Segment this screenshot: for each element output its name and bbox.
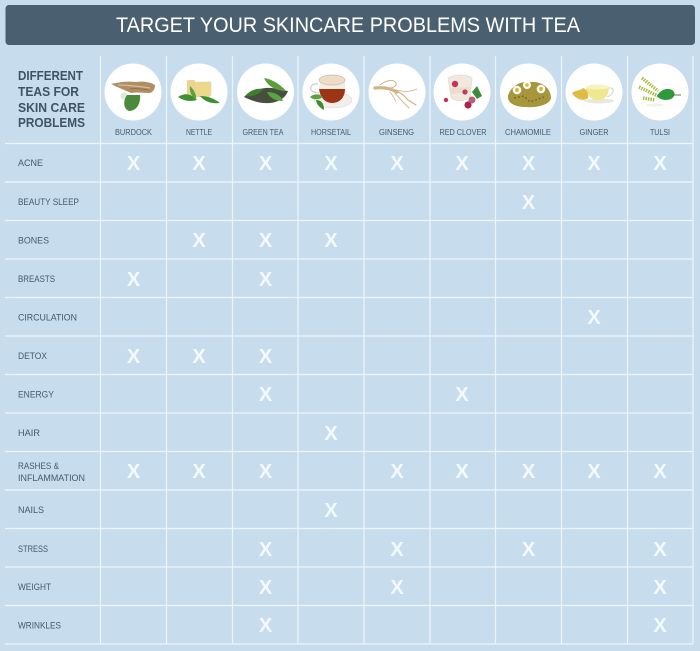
tea names <box>115 128 670 137</box>
row labels <box>18 158 85 630</box>
marks: breasts <box>127 269 273 291</box>
table heading: DIFFERENT <box>18 69 83 83</box>
marks: acne <box>127 153 667 175</box>
icon: tulsi <box>632 64 688 120</box>
marks: acne: X <box>455 153 469 175</box>
row labels: NAILS <box>18 505 44 515</box>
table heading: TEAS FOR <box>18 85 79 99</box>
marks: circulation: X <box>587 307 601 329</box>
table heading: PROBLEMS <box>18 116 85 130</box>
marks: stress: X <box>390 539 404 561</box>
marks: acne: X <box>324 153 338 175</box>
icon: green tea <box>237 64 294 120</box>
marks: beauty sleep: X <box>522 192 536 214</box>
tea names: TULSI <box>650 128 670 137</box>
marks: rashes and inflammation: X <box>192 461 206 483</box>
icon: chamomile <box>500 64 557 120</box>
marks: bones: X <box>324 230 338 252</box>
marks: rashes and inflammation: X <box>522 461 536 483</box>
row labels: ENERGY <box>18 390 54 400</box>
marks: nails: X <box>324 500 338 522</box>
marks: hair: X <box>324 423 338 445</box>
row labels: INFLAMMATION <box>18 473 85 483</box>
marks: detox <box>127 346 273 368</box>
marks: rashes and inflammation: X <box>455 461 469 483</box>
marks: rashes and inflammation: X <box>653 461 667 483</box>
marks: breasts: X <box>127 269 141 291</box>
title banner <box>6 5 695 45</box>
tea names: RED CLOVER <box>440 128 487 137</box>
icon: ginseng <box>368 64 426 120</box>
marks: acne: X <box>653 153 667 175</box>
marks: bones: X <box>259 230 273 252</box>
marks: acne: X <box>522 153 536 175</box>
tea names: CHAMOMILE <box>505 128 551 137</box>
marks: rashes and inflammation: X <box>259 461 273 483</box>
row labels: BEAUTY SLEEP <box>18 197 79 207</box>
row labels: HAIR <box>18 428 40 438</box>
marks: wrinkles <box>259 615 667 637</box>
title: TARGET YOUR SKINCARE PROBLEMS WITH TEA <box>116 14 580 37</box>
marks: acne: X <box>192 153 206 175</box>
marks: detox: X <box>259 346 273 368</box>
row labels: DETOX <box>18 351 47 361</box>
marks: stress <box>259 539 667 561</box>
marks: rashes and inflammation: X <box>390 461 404 483</box>
marks: weight: X <box>653 577 667 599</box>
tea names: GINGER <box>580 128 609 137</box>
marks: weight: X <box>259 577 273 599</box>
marks: acne: X <box>259 153 273 175</box>
marks: rashes and inflammation <box>127 461 667 483</box>
marks: detox: X <box>127 346 141 368</box>
table heading: SKIN CARE <box>18 101 85 115</box>
tea names: NETTLE <box>186 128 212 137</box>
marks: weight: X <box>390 577 404 599</box>
row labels: RASHES & <box>18 461 59 471</box>
row labels: BONES <box>18 236 49 246</box>
marks: stress: X <box>653 539 667 561</box>
icon: burdock <box>104 64 162 120</box>
marks: rashes and inflammation: X <box>587 461 601 483</box>
row labels: ACNE <box>18 158 43 168</box>
table heading <box>18 69 85 130</box>
marks: acne: X <box>390 153 404 175</box>
marks: bones: X <box>192 230 206 252</box>
icon: horsetail <box>302 64 360 120</box>
row labels: STRESS <box>18 544 48 554</box>
marks: rashes and inflammation: X <box>127 461 141 483</box>
icon: nettle <box>170 64 228 120</box>
marks: acne: X <box>587 153 601 175</box>
marks: energy <box>259 384 469 406</box>
marks: acne: X <box>127 153 141 175</box>
tea names: GREEN TEA <box>242 128 284 137</box>
marks: stress: X <box>259 539 273 561</box>
icon: ginger <box>566 64 622 120</box>
tea names: GINSENG <box>379 128 414 137</box>
marks: wrinkles: X <box>259 615 273 637</box>
marks: detox: X <box>192 346 206 368</box>
tea names: HORSETAIL <box>311 128 351 137</box>
row labels: CIRCULATION <box>18 312 77 322</box>
icon: red clover <box>434 64 490 120</box>
marks: breasts: X <box>259 269 273 291</box>
row labels: BREASTS <box>18 274 55 284</box>
marks: wrinkles: X <box>653 615 667 637</box>
marks: energy: X <box>259 384 273 406</box>
tea names: BURDOCK <box>115 128 153 137</box>
row labels: WEIGHT <box>18 582 51 592</box>
marks: energy: X <box>455 384 469 406</box>
marks: weight <box>259 577 667 599</box>
marks: bones <box>192 230 338 252</box>
marks: stress: X <box>522 539 536 561</box>
row labels: WRINKLES <box>18 620 61 630</box>
